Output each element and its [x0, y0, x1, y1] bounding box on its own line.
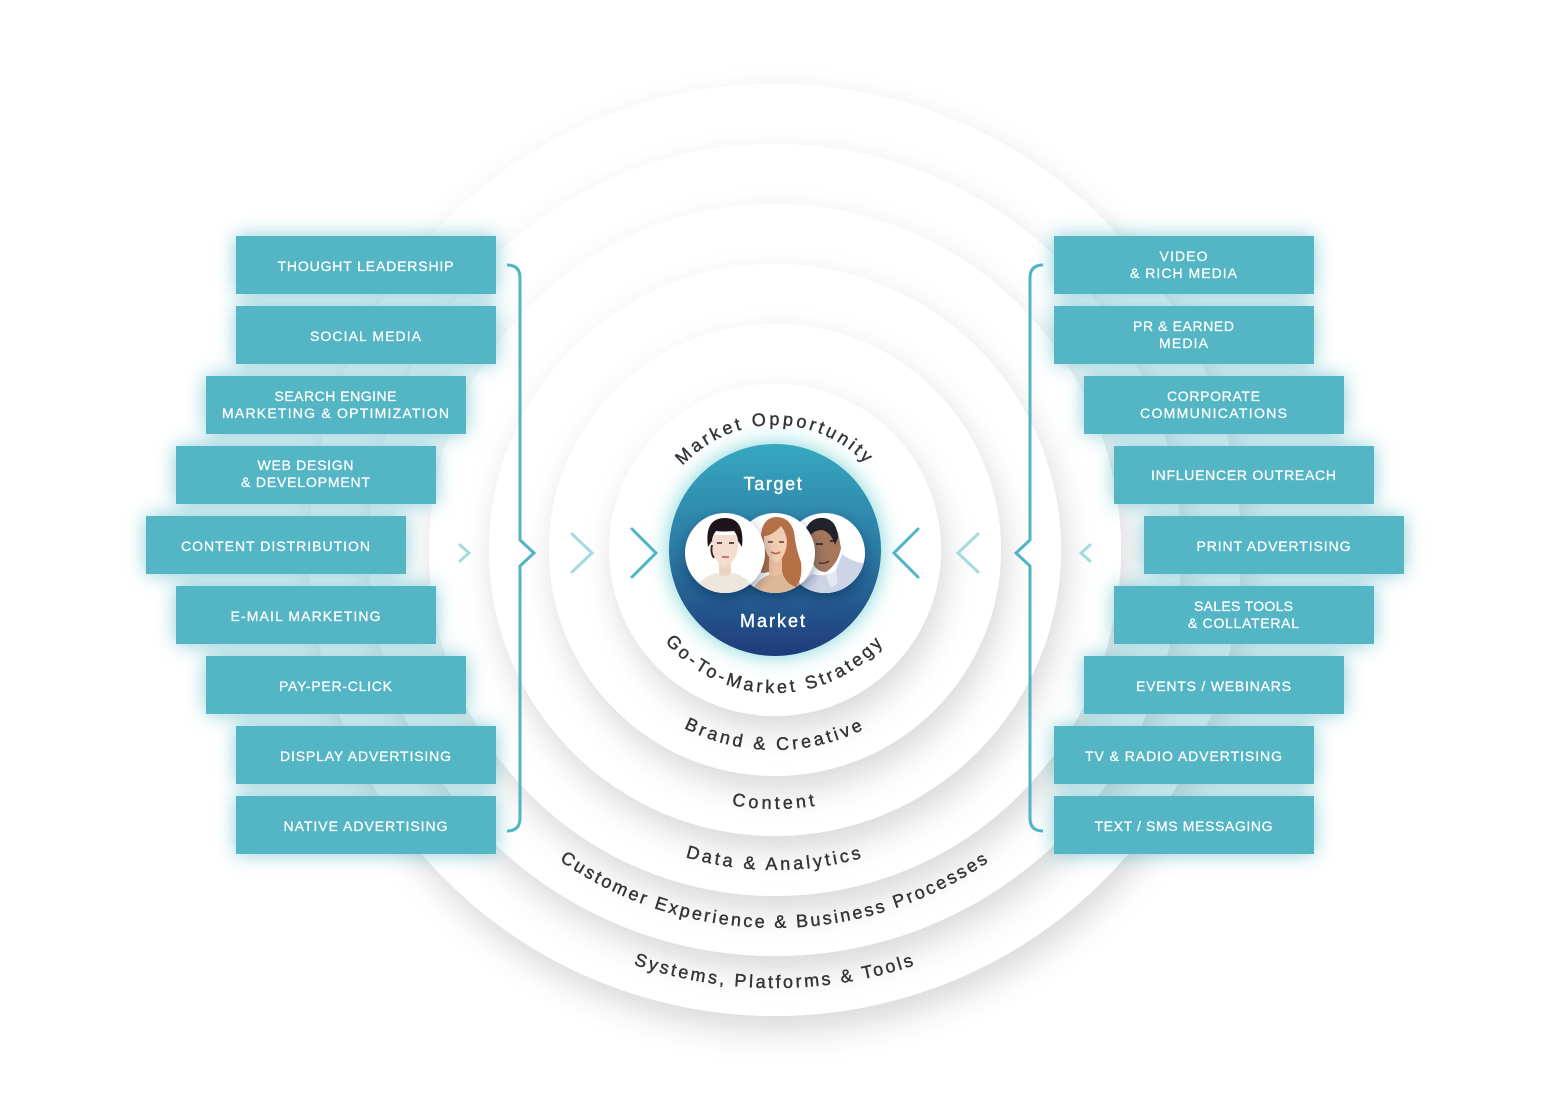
- box: Display Advertising: DISPLAY ADVERTISING: [280, 748, 451, 764]
- box: Corporate Communications: CORPORATE: [1167, 388, 1260, 404]
- box: Search Engine Marketing: [206, 376, 466, 434]
- box: Pay-Per-Click: PAY-PER-CLICK: [279, 678, 393, 694]
- arrow: left small: [460, 545, 469, 561]
- box: Print Advertising: [1144, 516, 1404, 574]
- box: Native Advertising: NATIVE ADVERTISING: [284, 818, 448, 834]
- box: Print Advertising: PRINT ADVERTISING: [1196, 538, 1350, 554]
- portrait: woman with auburn hair: [735, 513, 815, 600]
- ring label: Market Opportunity: Market Opportunity: [674, 413, 872, 465]
- box: Text / SMS: TEXT / SMS MESSAGING: [1094, 818, 1272, 834]
- box: Corporate Communications: [1084, 376, 1344, 434]
- ring label: Data & Analytics: Data & Analytics: [686, 845, 860, 872]
- box: E-mail Marketing: [176, 586, 436, 644]
- core label: Market: Market: [740, 611, 807, 631]
- box: Sales Tools: [1114, 586, 1374, 644]
- ring label: Customer Experience & Business Processes: Customer Experience & Business Processes: [562, 852, 988, 928]
- box: Video: [1054, 236, 1314, 294]
- arrow: right medium: [958, 534, 978, 572]
- box: PR & Earned Media: PR & EARNED: [1133, 318, 1234, 334]
- arrow: right large: [894, 529, 918, 577]
- arrow: left large: [632, 529, 656, 577]
- box: Events / Webinars: [1084, 656, 1344, 714]
- ring label: Go-To-Market Strategy: Go-To-Market Strategy: [668, 636, 882, 694]
- box: Web Design: WEB DESIGN: [258, 457, 354, 473]
- box: Search Engine Marketing: MARKETING & OPTIMIZATION: [222, 405, 449, 421]
- box: Sales Tools: & COLLATERAL: [1188, 615, 1299, 631]
- box: Social Media: SOCIAL MEDIA: [310, 328, 422, 344]
- ring label: Content: Content: [733, 794, 815, 810]
- box: Content Distribution: CONTENT DISTRIBUTION: [181, 538, 370, 554]
- ring label: Systems, Platforms & Tools: Systems, Platforms & Tools: [634, 954, 913, 988]
- box: Search Engine Marketing: SEARCH ENGINE: [274, 388, 396, 404]
- concentric rings: [309, 84, 1241, 1016]
- box: Thought Leadership: THOUGHT LEADERSHIP: [278, 258, 454, 274]
- right bracket: [1016, 265, 1043, 831]
- box: Web Design: [176, 446, 436, 504]
- box: Text / SMS: [1054, 796, 1314, 854]
- box: PR & Earned Media: MEDIA: [1159, 335, 1209, 351]
- box: Thought Leadership: [236, 236, 496, 294]
- box: E-mail Marketing: E-MAIL MARKETING: [230, 608, 380, 624]
- box: Content Distribution: [146, 516, 406, 574]
- box: Video: VIDEO: [1160, 248, 1208, 264]
- box: PR & Earned Media: [1054, 306, 1314, 364]
- box: Influencer Outreach: INFLUENCER OUTREACH: [1151, 467, 1336, 483]
- target market core circle: [669, 444, 881, 656]
- box: Social Media: [236, 306, 496, 364]
- core label: Target: Target: [744, 474, 803, 494]
- box: Web Design: & DEVELOPMENT: [241, 474, 370, 490]
- left service list: [146, 236, 496, 854]
- arrow: right small: [1081, 545, 1090, 561]
- left bracket: [507, 265, 534, 831]
- box: Pay-Per-Click: [206, 656, 466, 714]
- box: Sales Tools: SALES TOOLS: [1194, 598, 1293, 614]
- box: Influencer Outreach: [1114, 446, 1374, 504]
- label glow behind service boxes: [146, 236, 1404, 854]
- box: Display Advertising: [236, 726, 496, 784]
- arrow: left medium: [572, 534, 592, 572]
- portrait: man: [785, 513, 866, 600]
- box: TV & Radio: TV & RADIO ADVERTISING: [1085, 748, 1282, 764]
- ring label: Brand & Creative: Brand & Creative: [684, 717, 862, 750]
- box: Corporate Communications: COMMUNICATIONS: [1140, 405, 1287, 421]
- box: Video: & RICH MEDIA: [1130, 265, 1238, 281]
- box: Events / Webinars: EVENTS / WEBINARS: [1136, 678, 1291, 694]
- box: TV & Radio: [1054, 726, 1314, 784]
- right service list: [1054, 236, 1404, 854]
- box: Native Advertising: [236, 796, 496, 854]
- portrait: woman with dark hair: [685, 513, 765, 600]
